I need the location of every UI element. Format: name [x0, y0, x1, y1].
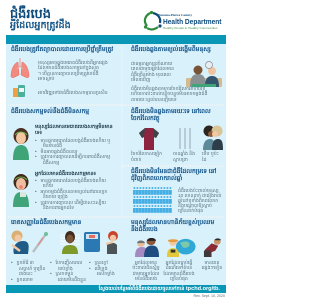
caption: shared clothes: ចែករំលែកសម្លៀក — [131, 151, 162, 156]
text: how spread: មើលឃើញ — [131, 77, 150, 82]
heading — [130, 107, 211, 123]
heading: ជំងឺរបេងត្រូវតែព្យាបាលដោយការប្រើថ្នាំត្រឹមត្រូវ — [11, 47, 113, 53]
text: latent TB — [35, 123, 113, 136]
list: symptoms col 2: ដោយមិនដឹងខ្លួន — [58, 276, 86, 282]
text: explanation: មនុស្សអាចឆ្លងមេរោគជំងឺរបេងពីអ្នកផ្សេង — [38, 60, 108, 64]
subtitle: អ្វីដែលអ្នកត្រូវដឹង — [10, 20, 71, 31]
icon: healthy woman — [13, 128, 29, 160]
panel: active TB — [11, 107, 113, 210]
caption: shared clothes — [131, 150, 162, 162]
icon: bent man — [203, 237, 222, 257]
caption: shared utensils: ចានឆ្នាំង និង — [173, 151, 195, 156]
heading: ជំងឺរបេងមិនមែនជាជំងឺដែលកម្រទេ នៅ — [131, 169, 216, 175]
panel: what does not spread TB — [130, 107, 223, 162]
top band — [6, 35, 226, 44]
text: spread note: ហើយការប៉ះពាល់បន្តិចបន្តួចមិនអាចចម្លងជំងឺ — [131, 91, 207, 96]
panel: who is at risk — [131, 218, 222, 282]
pictogram: people grid — [133, 187, 172, 213]
list: symptoms col 3: • ឈឺទ្រូង — [89, 266, 108, 270]
text: explanation: ។ បើគ្មានការព្យាបាលត្រឹមត្រូវទេជំងឺ — [38, 70, 99, 76]
caption: travelers: អ្នកដែលធ្លាប់ធ្វើ — [166, 260, 192, 264]
text: statistic: 10 លាននាក់ ជារៀងរាល់ — [178, 192, 221, 198]
caption: close contacts — [130, 260, 162, 282]
icon: woman coughing — [11, 230, 29, 254]
text: active TB: អ្នកដែលមានជំងឺរបេងសកម្មមាន៖ — [35, 171, 96, 177]
caption: weakened immunity: ផ្សេងៗទៀត — [202, 265, 222, 270]
list: active TB — [35, 177, 107, 210]
caption: close contacts: មានជំងឺរបេង — [135, 276, 157, 281]
text: spread note — [131, 85, 207, 102]
caption: weakened immunity: មានរោគ — [205, 260, 219, 264]
list: symptoms col 1: • ក្អករាំរ៉ៃ ៣ — [11, 260, 34, 265]
logo: health department: Health Department — [163, 16, 221, 26]
list: active TB: • មានផ្ទុកមេរោគដែលបង្កជំងឺរបេងហើយ — [35, 178, 106, 182]
text: latent TB: មនុស្សដែលមានមេរោគរបេងសកម្មមិនមាន — [35, 124, 113, 130]
icon: elderly pair — [135, 238, 159, 257]
heading: ជំងឺរបេងឆ្លងតាមខ្យល់ដង្ហើមពីមនុស្ស — [131, 47, 211, 53]
text: spread note: តាមរយៈខ្យល់បានឡើយទេ — [131, 96, 177, 102]
heading: ចែករំលែកវត្ថុ — [131, 116, 160, 122]
panel: how TB spreads — [131, 45, 222, 102]
list: active TB: ហើយ — [43, 183, 53, 188]
icon: two people and clock — [186, 61, 222, 87]
list: latent TB: • ត្រូវការការព្យាបាលដើម្បីការពារជំងឺសកម្ម — [35, 154, 110, 159]
list: active TB: • អាចចម្លងជំងឺបានតាមខ្យល់នៅពេលក្អក — [35, 188, 107, 194]
text: statistic: ឆ្នាំនៅទូទាំងពិភពលោក — [178, 198, 218, 202]
text: medicine note: អាចវិវឌ្ឍទៅជាជំងឺរបេងសកម្មបានប្រសិន — [38, 90, 108, 94]
icon: sick woman — [13, 174, 29, 207]
caption: weakened immunity — [199, 260, 225, 270]
list: symptoms col 1: • ក្អកឈាម — [11, 276, 33, 282]
icon: weight scale — [84, 232, 100, 252]
heading — [131, 218, 214, 233]
icon: utensils — [179, 128, 191, 149]
text: statistic: និងបណ្តាលឱ្យស្លាប់ — [178, 202, 212, 208]
caption: close contacts: អ្នកដែលមាន — [135, 260, 157, 264]
icon: lungs — [10, 58, 30, 78]
text: spread note: ជំងឺរបេងមិនឆ្លងតាមការចែករំលែកអាហារទេ — [131, 86, 205, 90]
list: symptoms col 3 — [89, 260, 115, 276]
icon: kissing couple — [203, 126, 223, 150]
text: how spread: ពេលជាមួយអ្នកដែលមាន — [131, 66, 174, 71]
text: explanation: ដែលមានជំងឺរបេងសកម្មនៅក្នុងសួត — [38, 65, 99, 70]
heading: ជំងឺរបេងមិនឆ្លងតាមរយៈទេ នៅពេល — [131, 108, 211, 114]
list: latent TB: • មានផ្ទុកមេរោគដែលបង្កជំងឺរបេងហើយ ឬ — [35, 138, 110, 142]
icon: medicine — [13, 85, 25, 97]
title: ជំងឺរបេង — [10, 6, 51, 21]
caption: close contacts: ជាមួយអ្នកដែល — [133, 270, 159, 276]
caption: kissing: ថើប ឬប៉ះ — [202, 151, 219, 156]
caption: travelers: ដំណើរទៅតំបន់ — [166, 265, 192, 270]
text: statistic: ច្រើននាក់បំផុត — [178, 208, 203, 212]
text: statistic — [178, 187, 222, 214]
heading: ជំងឺរបេងសកម្មទល់នឹងជំងឺមិនសកម្ម — [11, 108, 89, 114]
list: symptoms col 1: សប្តាហ៍ ឬច្រើន — [19, 266, 45, 270]
heading: នឹងជំងឺរបេង — [131, 227, 158, 233]
panel: TB statistic — [131, 167, 222, 214]
list: symptoms col 3: អស់កម្លាំង — [97, 271, 115, 276]
list: latent TB — [35, 137, 110, 166]
caption: shared utensils — [173, 150, 195, 162]
caption: travelers — [162, 260, 196, 282]
caption: close contacts: ប៉ះពាល់ជិតស្និទ្ធ — [132, 265, 160, 270]
main panel background — [6, 44, 226, 285]
list: symptoms col 2: • ស្រកទម្ងន់ — [50, 271, 73, 276]
caption: shared utensils: ស្លាបព្រា — [173, 156, 188, 162]
list: symptoms col 1 — [11, 260, 45, 282]
icon: man sweating — [60, 231, 80, 254]
list: active TB: • ត្រូវការការព្យាបាល ដើម្បីជាសះស្បើយ — [35, 200, 106, 204]
icon: thermometer — [32, 232, 48, 253]
heading: មនុស្សដែលមានហានិភ័យខ្ពស់ប្រឈម — [131, 220, 214, 226]
caption: shared clothes: បំពាក់ — [131, 156, 141, 162]
logo: health department: Tacoma-Pierce County — [158, 13, 192, 17]
list: symptoms col 2: យប់ខ្លាំង — [58, 266, 73, 270]
text: how spread: ជាធម្មតាអ្នកត្រូវចំណាយ — [131, 60, 172, 66]
text: explanation: អាចស្លាប់ — [38, 76, 54, 81]
list: symptoms col 2: • បែកញើសពេល — [50, 260, 82, 265]
heading: រោគសញ្ញានៃជំងឺរបេងសកម្មមាន — [11, 220, 81, 226]
caption: kissing: ដៃ — [202, 156, 206, 162]
icon: man coughing — [106, 231, 118, 254]
panel: signs of TB — [11, 218, 118, 284]
text: explanation — [38, 59, 108, 82]
bottom band — [6, 285, 226, 293]
panel: TB treatment intro — [10, 45, 114, 97]
list: latent TB: មិនមានជំងឺ — [43, 143, 62, 148]
icon: shirt — [139, 128, 159, 150]
heading: ជុំវិញពិភពលោករាល់ឆ្នាំ — [131, 176, 182, 182]
list: latent TB: • មិនអាចឆ្លងជំងឺបានទេ — [35, 148, 78, 154]
text: how spread — [131, 60, 174, 82]
list: active TB: និយាយ ច្រៀង — [43, 194, 68, 199]
list: active TB: និងការពារអ្នកដទៃ — [43, 205, 74, 210]
text: how spread: ជំងឺច្រើនម៉ោង មុនពេល — [131, 72, 171, 76]
revision date: Rev. Sept. 10, 2020 — [194, 294, 225, 298]
logo: health department: Healthy People in Healthy Communities — [163, 26, 218, 30]
caption: travelers: ច្រើនបំផុត — [170, 276, 188, 281]
list: symptoms col 2 — [50, 260, 86, 284]
list: latent TB: ជំងឺសកម្ម — [43, 160, 59, 164]
list: symptoms col 1: ជាងនេះ — [19, 271, 33, 276]
caption: kissing — [202, 150, 219, 162]
text: latent TB: ទេ៖ — [35, 130, 42, 136]
icon: traveler and globe — [166, 238, 196, 257]
heading — [131, 167, 216, 182]
list: symptoms col 3: • គ្រុនក្តៅ — [89, 260, 108, 265]
caption: travelers: ដែលមានជំងឺរបេង — [163, 270, 195, 276]
logo: health department — [144, 10, 222, 31]
text: statistic: ជំងឺរបេងប៉ះពាល់មនុស្ស — [178, 188, 219, 192]
bottom band: ស្វែងយល់បន្ថែមអំពីជំងឺរបេងដោយចូលទៅកាន់ tpchd.org/tb. — [99, 286, 220, 292]
